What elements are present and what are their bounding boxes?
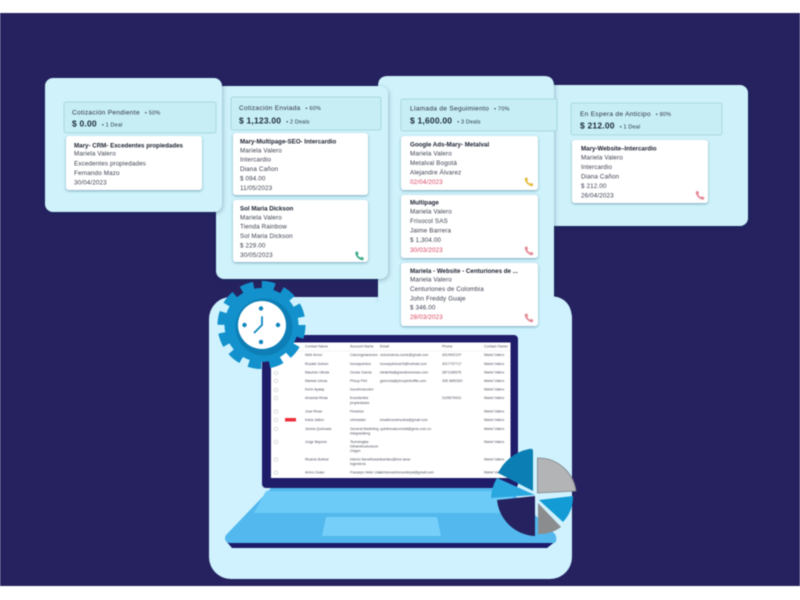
CRM contacts table: Ocular Garcia <box>350 370 372 374</box>
deal card: Mary-Website-Intercardio: 26/04/2023 <box>581 192 614 200</box>
CRM contacts table: Phone <box>442 344 452 348</box>
deal card: Multipage: Frisocol SAS <box>410 218 448 225</box>
deal card: Website Centuriones: Mariela - Website - Centuriones de ... <box>410 268 518 275</box>
deal card: Sol Maria Dickson: 30/05/2023 <box>240 252 273 259</box>
CRM contacts table: Florarios <box>350 410 364 414</box>
CRM contacts table: Unimaster <box>350 418 367 422</box>
deal card: Mary-Website-Intercardio: Mary-Website–Intercardio <box>581 146 657 152</box>
CRM contacts table: 3871166976 <box>442 370 461 374</box>
CRM contacts table: kmailervesimustra@gmail.com <box>380 418 428 422</box>
CRM contacts table: Kerin Ayalay <box>305 388 325 392</box>
column header: En Espera de Anticipo <box>571 103 722 135</box>
pie slice: blue right <box>539 496 573 522</box>
column header: Cotización Enviada: $ 1,123.00 • 2 Deals <box>239 116 310 126</box>
CRM contacts table: ceicomarcia.comiz@gmail.com <box>380 353 428 357</box>
deal card: Website Centuriones: 28/03/2023 <box>410 314 443 321</box>
pie slice: dark grey <box>538 503 561 534</box>
CRM contacts table <box>271 342 510 478</box>
CRM contacts table: 3017737717 <box>442 362 462 366</box>
column header: Cotización Enviada: Cotización Enviada • 60% <box>239 105 321 112</box>
deal card: Sol Maria Dickson: Mariela Valero <box>240 214 282 222</box>
CRM contacts table: Mariel Valero <box>484 362 504 366</box>
CRM contacts table: 3105076421 <box>442 396 462 400</box>
CRM contacts table: Incurimoscolen <box>350 388 374 392</box>
deal card: Multipage: 30/03/2023 <box>410 247 443 254</box>
deal card: Google Ads: Mariela Valero <box>410 150 452 158</box>
CRM contacts table: Jose Rivas <box>305 410 322 414</box>
CRM contacts table: Mariel Valero <box>484 440 504 444</box>
pie slice: grey large <box>538 458 576 493</box>
deal card: Google Ads: Alejandre Álvarez <box>410 168 461 176</box>
CRM contacts table: Caicongelaciones <box>350 353 378 357</box>
deal card: Mary-Website-Intercardio: Mariela Valero <box>581 154 623 162</box>
CRM contacts table: Email <box>380 344 389 348</box>
deal card: Mary-Website-Intercardio <box>572 140 708 203</box>
CRM contacts table: Interior Beneficiado <box>350 458 380 462</box>
deal card: Mary-Multipage: $ 094.00 <box>240 176 266 182</box>
deal card: Mary-Website-Intercardio: $ 212.00 <box>581 183 607 190</box>
icon: gear with clock <box>222 286 300 364</box>
deal card: Mary-Website-Intercardio: Intercardio <box>581 164 612 171</box>
CRM contacts table: Phcup Pint <box>350 379 367 383</box>
deal card: Sol Maria Dickson: Sol Maria Dickson <box>240 206 294 212</box>
column header: Cotización Pendiente: $ 0.00 • 1 Deal <box>72 118 122 128</box>
chart: exploded pie <box>491 449 576 536</box>
column header: Llamada de Seguimiento <box>401 99 557 131</box>
deal card: Mary-Multipage: 11/05/2023 <box>240 185 273 192</box>
laptop screen frame <box>262 335 518 488</box>
panel: laptop backdrop <box>209 297 572 579</box>
CRM contacts table: Arrico Guian <box>305 470 325 474</box>
deal card: Sol Maria Dickson <box>233 200 368 262</box>
deal card: Multipage: Mariela Valero <box>410 208 452 216</box>
column header: En Espera de Anticipo: En Espera de Anticipo • 80% <box>580 111 671 118</box>
panel: Llamada de Seguimiento <box>378 76 572 345</box>
deal card: Multipage: Jaime Barrera <box>410 228 451 234</box>
CRM contacts table: Mariela Uricas <box>305 379 328 383</box>
CRM contacts table: Jeloria Quinnado <box>305 427 332 431</box>
CRM contacts table: inovaquimica19@hotmail.com <box>380 362 427 366</box>
CRM contacts table: Mariel Valero <box>484 410 504 414</box>
CRM contacts table: integraciteng <box>350 432 370 436</box>
CRM contacts table: Jorge Bayona <box>305 440 327 444</box>
deal card: Sol Maria Dickson: $ 229.00 <box>240 242 266 250</box>
column header: Cotización Enviada <box>231 97 381 130</box>
CRM contacts table: Excedentes <box>350 396 369 400</box>
panel: En Espera de Anticipo <box>540 85 748 226</box>
CRM contacts table: propiedades <box>350 401 370 405</box>
deal card: Website Centuriones: John Freddy Guaje <box>410 296 466 302</box>
deal card: Multipage: Multipage <box>410 200 439 206</box>
pie slice: dark blue <box>498 449 533 491</box>
deal card: Google Ads <box>401 136 538 190</box>
deal card: Google Ads: Metalval Bogotá <box>410 160 457 167</box>
deal card: Mary-Multipage: Diana Cañon <box>240 166 278 173</box>
CRM contacts table: Contact Name <box>305 344 328 348</box>
CRM contacts table: elioterita@grandlomcesse.com <box>380 370 428 374</box>
column header: Cotización Pendiente <box>64 102 216 133</box>
deal card: Google Ads: Google Ads-Mary- Metalval <box>410 142 489 148</box>
CRM contacts table: Origen <box>350 449 361 453</box>
panel: Cotización Pendiente <box>45 78 222 212</box>
pie slice: navy <box>497 496 535 536</box>
CRM contacts table: Rosalis Suinen <box>305 362 328 366</box>
CRM contacts table: Mariel Valero <box>484 379 504 383</box>
deal card: Mary CRM: Mary- CRM- Excedentes propiedades <box>74 142 184 150</box>
deal card: Website Centuriones <box>401 263 538 326</box>
pie slice: light blue <box>491 478 535 498</box>
laptop base <box>225 487 556 548</box>
CRM contacts table: gerencia@phcupintrufflls.com <box>380 379 426 383</box>
deal card: Mary CRM: 30/04/2023 <box>74 180 107 186</box>
CRM contacts table: Mariel Valero <box>484 427 504 431</box>
deal card: Website Centuriones: $ 346.00 <box>410 304 436 312</box>
deal card: Mary CRM: Fernando Mazo <box>74 170 120 177</box>
panel: Cotización Enviada <box>216 86 388 279</box>
deal card: Mary CRM <box>66 136 202 190</box>
CRM contacts table: crimicnuelmcounterpa@gmail.com <box>380 470 434 474</box>
deal card: Sol Maria Dickson: Tienda Rainbow <box>240 224 287 230</box>
deal card: Mary-Multipage <box>233 133 368 195</box>
CRM contacts table: Mariel Valero <box>484 458 504 462</box>
deal card: Mary-Multipage: Mary-Multipage-SEO- Intercardio <box>240 138 336 146</box>
CRM contacts table: quinlimvalconmail@gens.com.co <box>380 427 431 431</box>
column header: En Espera de Anticipo: $ 212.00 • 1 Deal <box>580 120 640 130</box>
deal card: Mary-Website-Intercardio: Diana Cañon <box>581 174 619 180</box>
CRM contacts table: Ingeniería <box>350 462 366 466</box>
deal card: Sol Maria Dickson: Sol Maria Dickson <box>240 233 293 240</box>
CRM contacts table: 3014902107 <box>442 353 462 357</box>
CRM contacts table: Mariel Valero <box>484 418 504 422</box>
CRM contacts table: Mariel Valero <box>484 370 504 374</box>
deal card: Google Ads: 02/04/2023 <box>410 179 443 186</box>
CRM contacts table: Mauricio Ulloda <box>305 370 329 374</box>
column header: Llamada de Seguimiento: $ 1,600.00 • 3 Deals <box>410 116 481 126</box>
column header: Llamada de Seguimiento: Llamada de Seguimiento • 70% <box>410 106 510 112</box>
CRM contacts table: Inovaquimica <box>350 362 371 366</box>
CRM contacts table: General Madinting <box>350 427 379 431</box>
CRM contacts table: Karla Jaillon <box>305 418 324 422</box>
deal card: Mary CRM: Mariela Valero <box>74 150 116 158</box>
laptop <box>225 335 556 548</box>
CRM contacts table: ibardiso@bne.tarax <box>380 458 411 462</box>
CRM contacts table: Ricardo Bolivar <box>305 458 330 462</box>
deal card: Multipage: $ 1,304.00 <box>410 237 441 244</box>
CRM contacts table: Infraestructuracon <box>350 444 378 448</box>
deal card: Mary CRM: Excedentes propiedades <box>74 160 146 168</box>
CRM contacts table: Contact Owner <box>484 344 509 348</box>
CRM contacts table: Account Name <box>350 344 374 348</box>
deal card: Mary-Multipage: Mariela Valero <box>240 148 282 154</box>
CRM contacts table: Mariel Valero <box>484 388 504 392</box>
deal card: Mary-Multipage: Intercardio <box>240 156 271 164</box>
deal card: Website Centuriones: Mariela Valero <box>410 276 452 284</box>
CRM contacts table: Nelir Arroci <box>305 353 322 357</box>
CRM contacts table: Amanda Rivas <box>305 396 328 400</box>
CRM contacts table: Fracarpo Heler Ltda <box>350 470 381 474</box>
bottom white band <box>0 586 800 600</box>
CRM contacts table: Mariel Valero <box>484 353 504 357</box>
CRM contacts table: 305 3850320 <box>442 379 462 383</box>
CRM contacts table: Mariel Valero <box>484 396 504 400</box>
CRM contacts table: Tecnologias <box>350 440 369 444</box>
CRM contacts table: Mariel Valero <box>484 470 504 474</box>
column header: Cotización Pendiente: Cotización Pendiente • 50% <box>72 110 160 116</box>
deal card: Website Centuriones: Centuriones de Colombia <box>410 286 484 293</box>
deal card: Multipage <box>401 195 538 258</box>
